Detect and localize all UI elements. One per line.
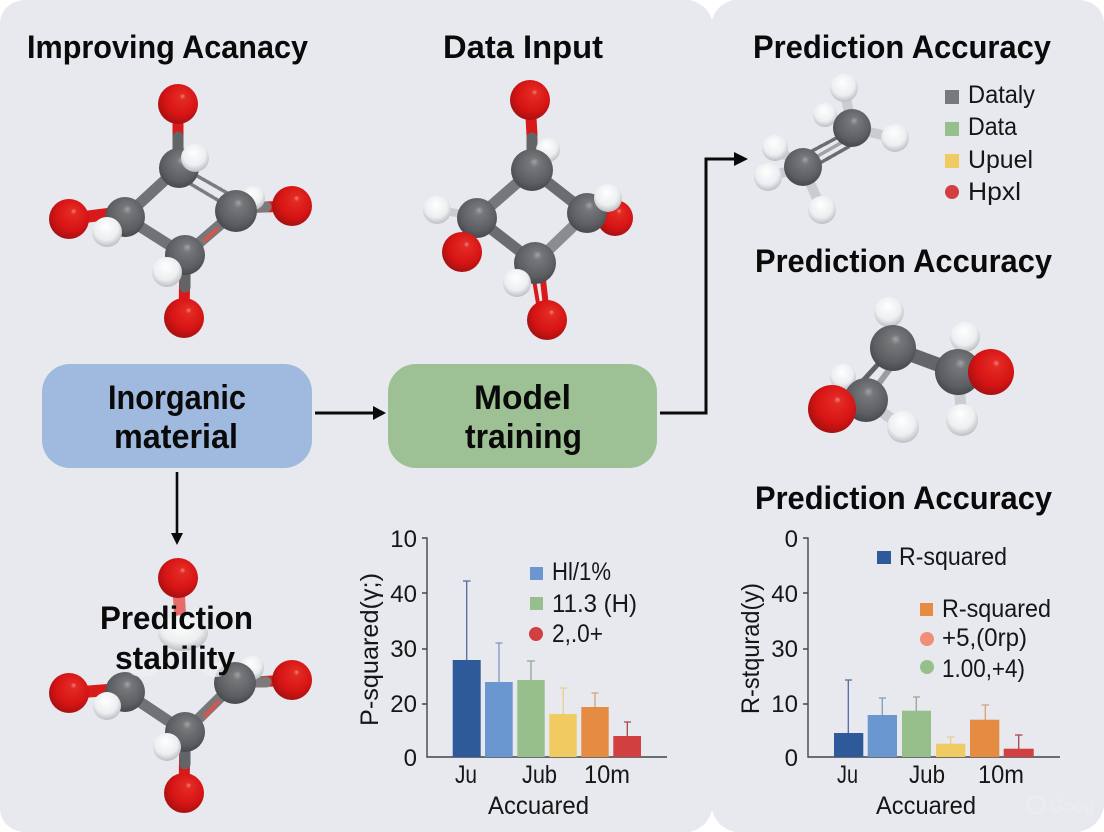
y axis tick labels: 30 <box>390 636 417 663</box>
y axis tick labels <box>390 526 417 772</box>
error bars <box>845 680 1022 749</box>
heading: Prediction stability <box>100 600 253 676</box>
y axis tick labels: 30 <box>771 636 798 663</box>
legend: right chart: 1.00,+4) <box>942 655 1025 683</box>
y axis tick labels: 10 <box>390 526 417 553</box>
box: Inorganic material: material <box>114 418 238 456</box>
icon: molecule improving acanacy <box>49 84 312 338</box>
arrow: inorganic material to model training <box>315 406 386 420</box>
error bars <box>463 581 631 736</box>
legend item: Hpxl: Hpxl <box>968 178 1021 206</box>
y axis title: P-squared(γ;) <box>356 573 384 726</box>
y axis tick labels: 10 <box>771 691 798 718</box>
bar chart: middle panel: Jub <box>522 761 557 789</box>
bar chart: middle panel <box>356 526 667 820</box>
x axis title: Accuared <box>876 792 976 820</box>
panel: left workflow panel <box>0 0 712 832</box>
box: Model training: Model <box>474 379 571 417</box>
legend item: Dataly: Dataly <box>968 81 1035 109</box>
legend: right chart: +5,(0rp) <box>942 624 1027 652</box>
x axis labels: Ju <box>455 761 477 789</box>
legend item: Data: Data <box>968 113 1017 141</box>
icon: molecule middle right <box>808 297 1014 443</box>
watermark: faint mark bottom right: Goog <box>1050 796 1094 816</box>
heading: Prediction stability: Prediction <box>100 600 253 636</box>
heading: Prediction Accuracy top: Prediction Accuracy <box>753 29 1051 65</box>
arrow: model training up to prediction accuracy <box>660 152 748 413</box>
chart axes <box>803 538 1060 757</box>
heading: Improving Acanacy: Improving Acanacy <box>27 29 308 65</box>
x axis title: Accuared <box>488 792 589 820</box>
chart axes <box>422 538 667 757</box>
x axis labels: Ju <box>837 761 858 789</box>
icon: molecule prediction stability <box>49 558 312 813</box>
y axis tick labels: 0 <box>785 526 798 553</box>
bar chart: middle panel: 10m <box>584 761 630 789</box>
y axis tick labels: 20 <box>390 691 417 718</box>
y axis tick labels: 40 <box>390 581 417 608</box>
y axis tick labels: 0 <box>785 745 798 772</box>
heading: Data Input: Data Input <box>443 29 603 65</box>
legend: middle chart: 11.3 (H) <box>552 590 637 618</box>
legend item: Upuel: Upuel <box>968 146 1033 174</box>
y axis title: R-stqurad(y) <box>737 583 765 714</box>
legend: middle chart: Hl/1% <box>552 558 611 586</box>
panel: right results panel <box>712 0 1104 832</box>
box: Model training <box>388 364 657 468</box>
heading: Prediction Accuracy lower: Prediction Accuracy <box>755 480 1052 516</box>
watermark: faint mark bottom right <box>1028 796 1094 816</box>
box: Model training: training <box>465 418 582 456</box>
bars <box>453 660 481 757</box>
y axis tick labels: 0 <box>404 745 417 772</box>
bar chart: right panel: Jub <box>909 761 945 789</box>
legend: middle chart <box>529 558 637 648</box>
box: Inorganic material: Inorganic <box>108 379 246 417</box>
legend: top right molecule key <box>945 81 1035 206</box>
box: Inorganic material <box>42 364 312 468</box>
bars <box>834 733 863 757</box>
bar chart: right panel <box>737 526 1060 820</box>
bar chart: right panel: 10m <box>978 761 1024 789</box>
icon: molecule ethane top right <box>754 74 909 224</box>
legend: right chart: R-squared <box>899 543 1007 571</box>
heading: Prediction Accuracy middle: Prediction Accuracy <box>755 243 1052 279</box>
legend: middle chart: 2,.0+ <box>552 620 603 648</box>
arrow: inorganic material down to prediction stability <box>171 472 183 545</box>
legend: right chart <box>877 543 1051 683</box>
heading: Prediction stability: stability <box>115 640 235 676</box>
legend: right chart: R-squared <box>942 595 1051 623</box>
icon: molecule data input <box>423 80 633 340</box>
y axis tick labels <box>771 526 798 772</box>
y axis tick labels: 40 <box>771 581 798 608</box>
